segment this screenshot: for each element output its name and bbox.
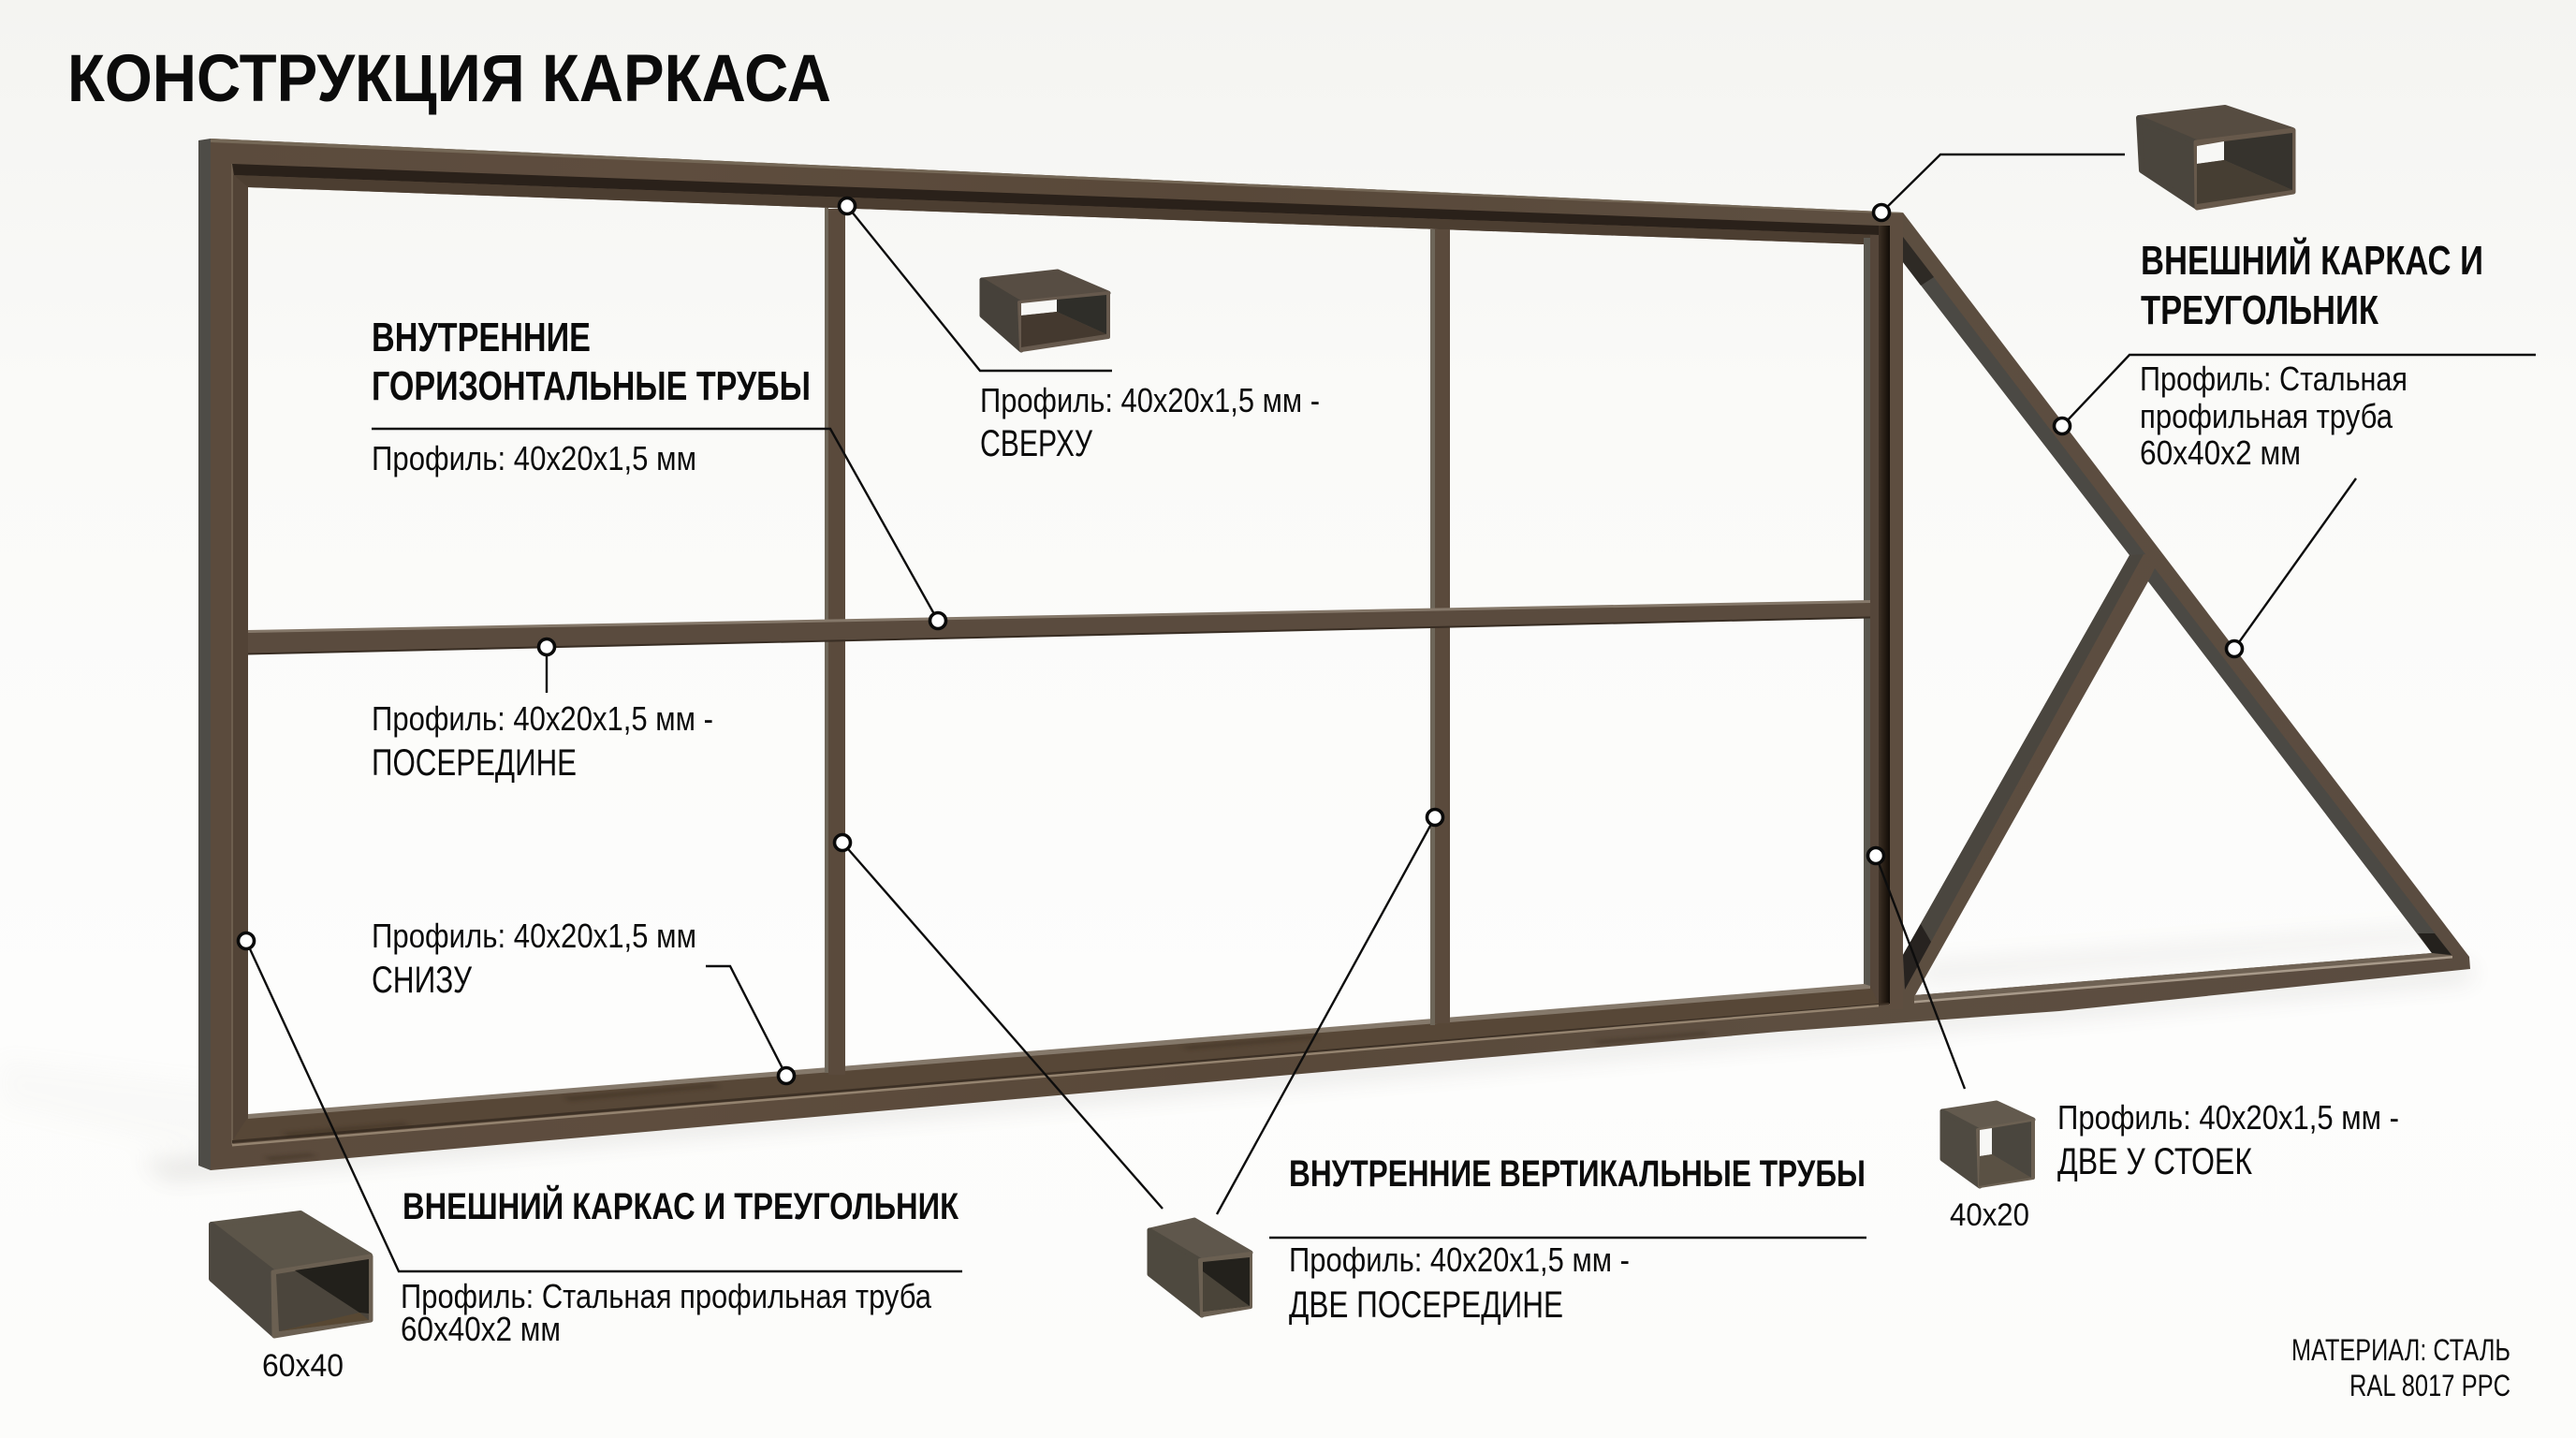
leader line: top right corner — [1874, 154, 2125, 221]
text block: vertical pipes — [1289, 1153, 1866, 1326]
leader line: diagonal upper — [2054, 355, 2536, 434]
text block: outer frame lower: ВНЕШНИЙ КАРКАС И ТРЕУГОЛЬНИК — [402, 1184, 959, 1227]
bottom flange shadow — [232, 1003, 1889, 1143]
triangle bottom bar highlights — [1914, 953, 2452, 1002]
leader line: diagonal lower — [2226, 478, 2356, 657]
leader line: vertical pipe 2 — [1217, 809, 1443, 1214]
leader line: post pipe — [1868, 848, 1965, 1089]
left post front seam — [231, 164, 233, 1145]
icon: tube 40x20 — [1942, 1103, 2033, 1186]
material note: RAL 8017 PPC — [2349, 1369, 2510, 1402]
icon: tube vertical — [1149, 1220, 1251, 1315]
diagonal lower grey side — [2148, 568, 2452, 955]
text block: vertical pipes: ДВЕ ПОСЕРЕДИНЕ — [1289, 1284, 1563, 1326]
text block: outer frame lower — [401, 1184, 959, 1348]
left inner tube — [233, 175, 248, 1139]
leader line: middle pipe — [539, 638, 554, 693]
bottom opening edge — [248, 984, 1870, 1119]
inner vertical 2 — [1435, 229, 1450, 1023]
text block: outer frame right: профильная труба — [2140, 397, 2393, 435]
text block: horizontal pipes: Профиль: 40х20х1,5 мм — [372, 439, 696, 477]
text block: outer frame lower: 60х40х2 мм — [401, 1310, 561, 1348]
leader line: outer frame lower — [238, 932, 962, 1271]
text block: outer frame right — [2140, 236, 2483, 472]
text block: middle — [372, 699, 713, 784]
leader line: vertical heading rule — [1269, 1237, 1866, 1239]
size label 60x40: 60х40 — [262, 1348, 344, 1384]
text block: outer frame lower: Профиль: Стальная профильная труба — [401, 1277, 932, 1315]
icon: tube top middle — [982, 271, 1108, 350]
text block: outer frame right: Профиль: Стальная — [2140, 360, 2408, 398]
text block: posts — [2057, 1098, 2399, 1182]
top recess shadow — [232, 164, 1879, 235]
right post grey lip — [1864, 238, 1870, 987]
text block: bottom: Профиль: 40х20х1,5 мм — [372, 917, 696, 955]
text block: horizontal pipes — [372, 315, 811, 477]
top edge highlight — [211, 139, 1903, 214]
right post mid tube — [1870, 235, 1879, 1005]
title: КОНСТРУКЦИЯ КАРКАСА — [67, 42, 831, 116]
bottom flange highlight — [232, 1005, 1879, 1146]
text block: outer frame right: 60х40х2 мм — [2140, 433, 2301, 472]
leader line: horizontal heading — [372, 429, 945, 629]
text block: bottom — [372, 917, 696, 1001]
left post side — [198, 139, 211, 1170]
text block: middle: Профиль: 40х20х1,5 мм - — [372, 699, 713, 738]
leader line: top inner pipe — [839, 198, 1112, 371]
size label 40x20: 40х20 — [1950, 1197, 2029, 1233]
wear streaks — [262, 1032, 1713, 1161]
right post dark channel — [1879, 226, 1890, 1004]
middle horizontal bar — [248, 601, 1870, 654]
text block: top — [980, 381, 1320, 464]
inner vertical 1 — [828, 209, 845, 1075]
leader line: bottom pipe — [706, 966, 794, 1084]
gate frame — [198, 139, 2470, 1170]
bottom inner tube — [232, 986, 1879, 1141]
text block: top: Профиль: 40х20х1,5 мм - — [980, 381, 1320, 419]
text block: horizontal pipes: ВНУТРЕННИЕ — [372, 315, 591, 360]
text block: middle: ПОСЕРЕДИНЕ — [372, 742, 577, 784]
text block: bottom: СНИЗУ — [372, 960, 472, 1001]
icon: tube 60x40 — [212, 1213, 371, 1336]
icon: tube top right — [2139, 108, 2293, 208]
outer frame and triangle front face — [211, 139, 2470, 1170]
right post front — [1890, 213, 1903, 1009]
diagonal upper grey side — [1903, 237, 2145, 555]
material note: МАТЕРИАЛ: СТАЛЬ — [2291, 1333, 2510, 1367]
text block: vertical pipes: ВНУТРЕННИЕ ВЕРТИКАЛЬНЫЕ ТРУБЫ — [1289, 1153, 1866, 1195]
text block: outer frame right: ВНЕШНИЙ КАРКАС И — [2141, 236, 2483, 284]
text block: outer frame right: ТРЕУГОЛЬНИК — [2141, 287, 2378, 333]
text block: posts: ДВЕ У СТОЕК — [2057, 1141, 2253, 1182]
material note — [2291, 1333, 2510, 1402]
strut grey side — [1903, 554, 2144, 990]
text block: vertical pipes: Профиль: 40х20х1,5 мм - — [1289, 1240, 1630, 1279]
text block: posts: Профиль: 40х20х1,5 мм - — [2057, 1098, 2399, 1137]
floor shadow — [0, 927, 2471, 1181]
text block: horizontal pipes: ГОРИЗОНТАЛЬНЫЕ ТРУБЫ — [372, 363, 811, 409]
text block: top: СВЕРХУ — [980, 423, 1092, 464]
leader line: vertical pipe 1 — [835, 835, 1163, 1209]
